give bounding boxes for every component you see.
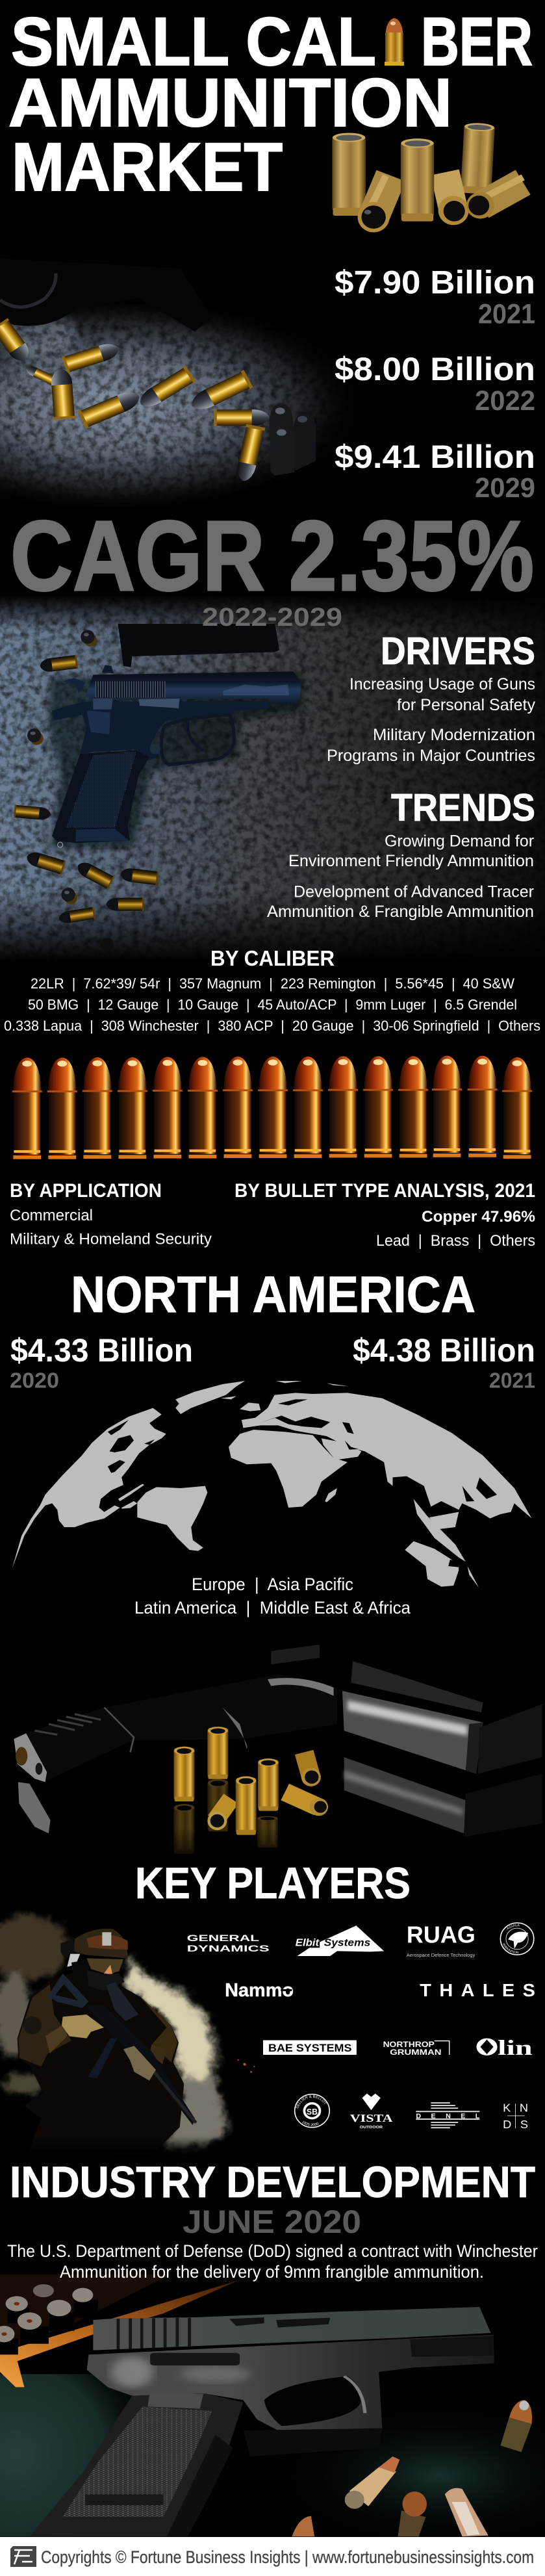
- logo: RUAG: [407, 1922, 475, 1958]
- pistol magazine: [18, 1661, 542, 1836]
- logo: Olin: [476, 2037, 533, 2060]
- loose bullets around pistol: [14, 630, 158, 951]
- north america 2020 value: [10, 1332, 193, 1392]
- logo: BAE Systems: BAE SYSTEMS: [268, 2042, 351, 2054]
- magazine: [118, 624, 279, 667]
- heading: by application: BY APPLICATION: [10, 1180, 162, 1202]
- driver 2: Military Modernization: [373, 726, 535, 744]
- title: AMMUNITION: [8, 65, 452, 141]
- photo: pistol and ammunition tray: [0, 2274, 545, 2536]
- value 2021: $7.90 Billion: [335, 264, 535, 300]
- photo: pistol with reflected casings: [14, 1645, 542, 1866]
- date: June 2020: JUNE 2020: [183, 2204, 361, 2240]
- value 2021: 2021: [478, 299, 535, 330]
- image: row of copper bullets: [12, 1056, 532, 1159]
- period: 2022-2029: [202, 603, 342, 632]
- soldier: [18, 1929, 196, 2156]
- logo: General Dynamics: GENERAL: [187, 1933, 260, 1943]
- logo: Vista Outdoor: OUTDOOR: [360, 2126, 383, 2130]
- value 2029: 2029: [475, 472, 535, 504]
- trend 2: Ammunition & Frangible Ammunition: [267, 903, 534, 921]
- logo: Denel: DENEL: [416, 2113, 480, 2120]
- logo: KNDS: N: [520, 2102, 528, 2115]
- shadow below pistol: [47, 674, 303, 849]
- driver 2: Programs in Major Countries: [327, 747, 535, 765]
- logo: RUAG: RUAG: [407, 1922, 475, 1948]
- smoke: [0, 1915, 229, 2149]
- photo: bullets scattered on concrete: [0, 122, 523, 513]
- application list: Commercial: [10, 1207, 93, 1224]
- logo: Olin: lin: [498, 2037, 533, 2060]
- logo: Nammo: Nammo: [225, 1981, 294, 2001]
- brass casings: [173, 1727, 328, 1835]
- logo: KNDS: [503, 2102, 528, 2131]
- loose brass bullets: [0, 318, 316, 483]
- caliber list: 50 BMG | 12 Gauge | 10 Gauge | 45 Auto/ACP | 9mm Luger | 6.5 Grendel: [28, 997, 517, 1012]
- footer: [0, 2537, 545, 2576]
- trend 2: Development of Advanced Tracer: [294, 882, 534, 901]
- loose cartridges: [292, 2400, 532, 2536]
- panel: by application: [10, 1180, 212, 1248]
- trend 1: Environment Friendly Ammunition: [288, 852, 534, 870]
- ammunition tray: [0, 2274, 240, 2387]
- pistol: [52, 665, 301, 847]
- pistol: [29, 2307, 494, 2536]
- map: world globe: [12, 1381, 532, 1588]
- development description: [7, 2241, 538, 2282]
- application list: [10, 1207, 212, 1248]
- title: MARKET: [12, 129, 283, 205]
- pistol slide and muzzle: [14, 1645, 337, 1782]
- logo: Vista Outdoor: VISTA: [350, 2111, 393, 2124]
- other types: Lead | Brass | Others: [376, 1232, 535, 1250]
- value 2022: 2022: [475, 385, 535, 417]
- north america 2021 value: $4.38 Billion: [353, 1332, 535, 1369]
- north america 2021 value: [353, 1332, 535, 1392]
- driver 1: Increasing Usage of Guns: [349, 675, 535, 693]
- logo: Aguila Ammunition: [500, 1922, 535, 1955]
- logo: Northrop Grumman: [383, 2041, 450, 2057]
- logo: Sellier and Bellot: SB: [307, 2107, 318, 2117]
- photo: blue pistol with bullets: [14, 624, 303, 951]
- trend 1: Growing Demand for: [385, 832, 534, 850]
- logo: Sellier and Bellot: SELLIER & BELLOT: [296, 2095, 327, 2109]
- panel: trends: [267, 786, 535, 921]
- casings reflection: [173, 1779, 278, 1854]
- panel: soldier with smoke: [0, 1915, 255, 2157]
- lit concrete floor: [0, 289, 382, 513]
- title: [8, 4, 533, 205]
- teal table surface: [0, 2374, 545, 2536]
- copper share: Copper 47.96%: [422, 1208, 535, 1226]
- regions list: Latin America | Middle East & Africa: [134, 1598, 411, 1617]
- panel: by caliber: [4, 946, 540, 1034]
- value 2021: [335, 264, 535, 330]
- caliber list: [4, 975, 540, 1034]
- trend 2: [267, 882, 534, 921]
- panel: company logos: [187, 1922, 535, 2131]
- logo: Northrop Grumman: NORTHROP: [383, 2041, 435, 2049]
- logo: Elbit Systems: Elbit: [296, 1938, 320, 1949]
- heading: key players: KEY PLAYERS: [135, 1859, 411, 1908]
- north america 2020 value: $4.33 Billion: [10, 1332, 193, 1369]
- development description: Ammunition for the delivery of 9mm frangible ammunition.: [60, 2262, 484, 2282]
- north america 2021 value: 2021: [489, 1369, 535, 1392]
- logo: Vista Outdoor: [350, 2094, 393, 2130]
- logo: KNDS: K: [503, 2102, 511, 2115]
- heading: trends: TRENDS: [391, 786, 535, 829]
- logo: Elbit Systems: Systems: [324, 1938, 371, 1949]
- logo: General Dynamics: DYNAMICS: [187, 1943, 270, 1953]
- bottom fade: [0, 2136, 238, 2157]
- icon: bullet as letter I: [385, 18, 404, 66]
- value 2029: $9.41 Billion: [335, 439, 535, 475]
- regions list: Europe | Asia Pacific: [192, 1575, 353, 1594]
- brass cartridge casings group: [332, 122, 523, 233]
- dark pistol silhouette: [0, 259, 212, 331]
- logo: Sellier and Bellot: [294, 2094, 330, 2128]
- logo: Denel: [416, 2103, 480, 2128]
- regions list: [134, 1575, 411, 1617]
- logo: KNDS: D: [503, 2119, 511, 2131]
- logo: Aguila Ammunition: AGUILA: [507, 1924, 520, 1930]
- application list: Military & Homeland Security: [10, 1231, 212, 1248]
- north america 2020 value: 2020: [10, 1369, 59, 1392]
- market values: [335, 264, 535, 504]
- logo: General Dynamics: [187, 1933, 270, 1953]
- logo: KNDS: S: [520, 2119, 528, 2131]
- icon: Fortune Business Insights logo: [10, 2546, 36, 2567]
- caliber list: 22LR | 7.62*39/ 54r | 357 Magnum | 223 Remington | 5.56*45 | 40 S&W: [31, 975, 514, 992]
- logo: RUAG: Aerospace Defence Technology: [407, 1952, 475, 1958]
- value 2029: [335, 439, 535, 504]
- heading: north america: NORTH AMERICA: [71, 1265, 475, 1323]
- heading: by caliber: BY CALIBER: [210, 946, 335, 970]
- logo: Northrop Grumman: GRUMMAN: [390, 2048, 441, 2057]
- photo: concrete floor behind blue pistol: [0, 595, 545, 961]
- sparks: [212, 2059, 255, 2073]
- title: SMALL CAL: [11, 4, 376, 80]
- value 2022: [335, 351, 535, 417]
- trend 1: [288, 832, 534, 870]
- driver 1: for Personal Safety: [397, 696, 535, 714]
- logo: Sellier and Bellot: 1825-2000: [301, 2121, 318, 2126]
- caliber list: 0.338 Lapua | 308 Winchester | 380 ACP | 20 Gauge | 30-06 Springfield | Others: [4, 1018, 540, 1034]
- value 2022: $8.00 Billion: [335, 351, 535, 387]
- panel: drivers: [327, 630, 535, 765]
- logo: Elbit Systems: [296, 1926, 384, 1956]
- driver 1: [349, 675, 535, 714]
- logo: Aguila Ammunition: AMMUNITION: [503, 1943, 518, 1953]
- logo: Thales: THALES: [420, 1980, 535, 2000]
- driver 2: [327, 726, 535, 765]
- panel: by bullet type: [234, 1180, 535, 1250]
